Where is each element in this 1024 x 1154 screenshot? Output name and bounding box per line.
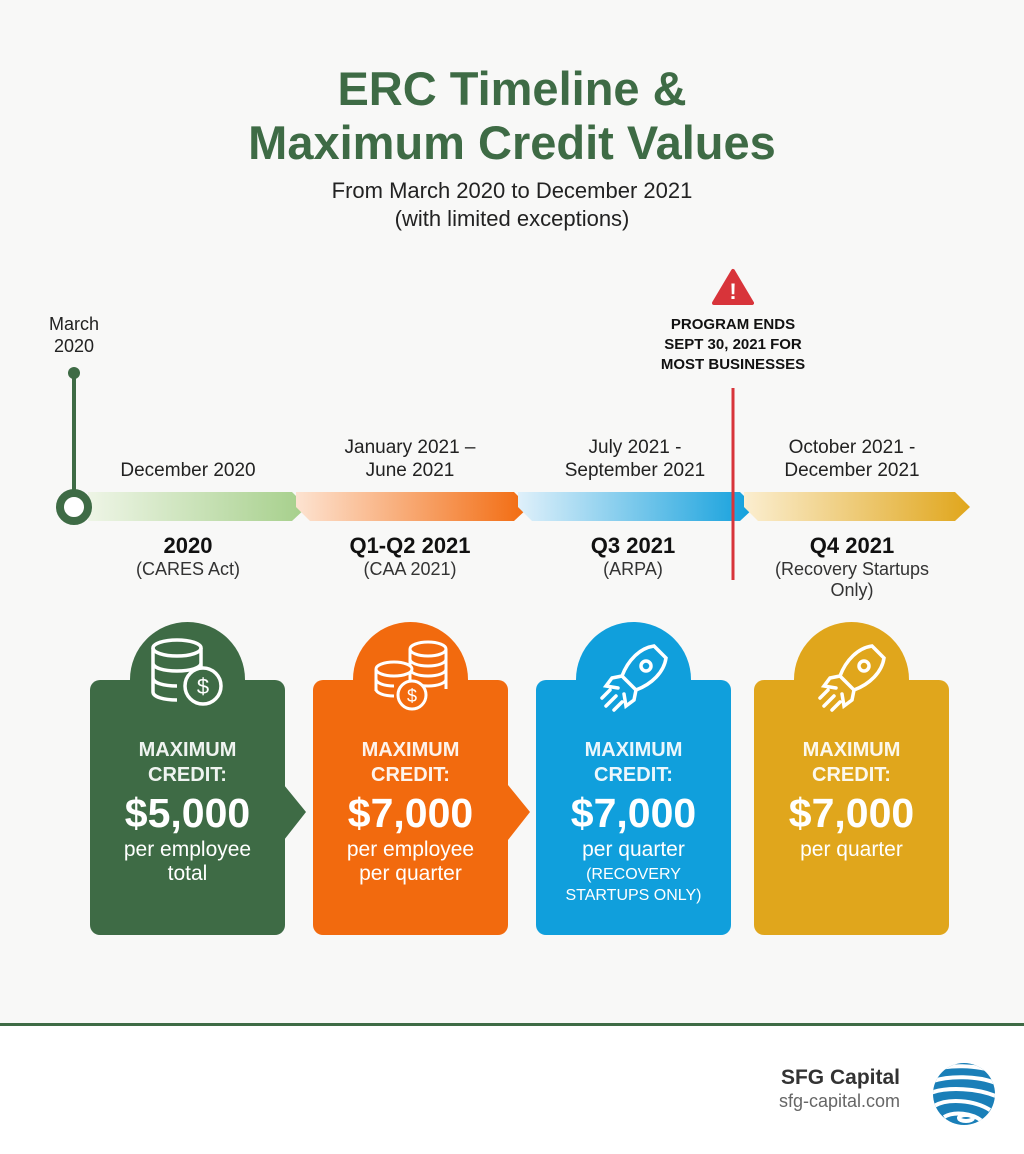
phase 2020: 2020 <box>164 533 212 558</box>
card: orange Q1-Q2 <box>313 622 508 935</box>
icon: coin stack: $ <box>197 674 209 699</box>
card: orange Q1-Q2: per quarter <box>359 862 462 885</box>
brand text: SFG Capital <box>781 1066 900 1089</box>
card: gold Q4: per quarter <box>800 838 903 861</box>
program end callout: PROGRAM ENDS <box>671 316 795 333</box>
warning icon: ! <box>729 279 737 304</box>
subtitle: (with limited exceptions) <box>395 206 629 231</box>
card: gold Q4: CREDIT: <box>812 764 891 786</box>
title: ERC Timeline & <box>337 62 687 115</box>
footer divider <box>0 1023 1024 1026</box>
connector arrows <box>285 785 530 840</box>
start marker: March 2020: 2020 <box>54 336 94 356</box>
phase Q1-Q2: (CAA 2021) <box>363 559 457 579</box>
phase 2020 <box>136 533 240 579</box>
phase Q1-Q2: Q1-Q2 2021 <box>349 533 471 558</box>
phase 2020: (CARES Act) <box>136 559 240 579</box>
text: September 2021 <box>565 460 705 481</box>
card: green 2020: total <box>168 862 207 885</box>
brand text: sfg-capital.com <box>779 1091 900 1111</box>
period labels: December 2020 <box>120 460 256 481</box>
icon: coins <box>374 640 448 710</box>
brand text <box>779 1066 900 1111</box>
timeline bar <box>56 367 970 580</box>
phase Q3: Q3 2021 <box>591 533 675 558</box>
start marker: March 2020 <box>49 314 99 356</box>
phase Q4: (Recovery Startups <box>775 559 929 579</box>
card: blue Q3: $7,000 <box>571 790 696 836</box>
card: blue Q3: per quarter <box>582 838 685 861</box>
card: orange Q1-Q2: per employee <box>347 838 474 861</box>
program end callout <box>661 316 805 373</box>
text: October 2021 - <box>789 437 915 458</box>
card: gold Q4 <box>754 622 949 935</box>
title: Maximum Credit Values <box>248 116 776 169</box>
phase Q3 <box>591 533 675 579</box>
phase Q4 <box>775 533 929 600</box>
card: gold Q4: MAXIMUM <box>803 739 900 761</box>
text: December 2021 <box>784 460 920 481</box>
card: blue Q3 <box>536 622 731 935</box>
card: orange Q1-Q2: MAXIMUM <box>362 739 459 761</box>
card: gold Q4: $7,000 <box>789 790 914 836</box>
card: orange Q1-Q2: CREDIT: <box>371 764 450 786</box>
phase Q4: Only) <box>830 580 874 600</box>
card: green 2020 <box>90 622 285 935</box>
logo: globe <box>933 1063 995 1125</box>
card: blue Q3: (RECOVERY <box>586 866 681 883</box>
text: June 2021 <box>366 460 454 481</box>
icon: coin stack <box>151 638 223 706</box>
icon: rocket <box>600 644 668 712</box>
icon: coins: $ <box>407 686 417 706</box>
start marker: March 2020: March <box>49 314 99 334</box>
program end callout: MOST BUSINESSES <box>661 356 805 373</box>
card: blue Q3: MAXIMUM <box>585 739 682 761</box>
card: green 2020: per employee <box>124 838 251 861</box>
text: January 2021 – <box>344 437 476 458</box>
card: blue Q3: STARTUPS ONLY) <box>565 887 702 904</box>
text: July 2021 - <box>589 437 681 458</box>
card: green 2020: $5,000 <box>125 790 250 836</box>
subtitle <box>332 178 692 231</box>
card: green 2020: CREDIT: <box>148 764 227 786</box>
card: green 2020: MAXIMUM <box>139 739 236 761</box>
card: orange Q1-Q2: $7,000 <box>348 790 473 836</box>
subtitle: From March 2020 to December 2021 <box>332 178 692 203</box>
phase Q1-Q2 <box>349 533 471 579</box>
title <box>248 62 776 169</box>
icon: rocket <box>818 644 886 712</box>
program end callout: SEPT 30, 2021 FOR <box>664 336 802 353</box>
phase Q3: (ARPA) <box>603 559 663 579</box>
warning icon <box>712 268 754 305</box>
phase Q4: Q4 2021 <box>810 533 894 558</box>
card: blue Q3: CREDIT: <box>594 764 673 786</box>
